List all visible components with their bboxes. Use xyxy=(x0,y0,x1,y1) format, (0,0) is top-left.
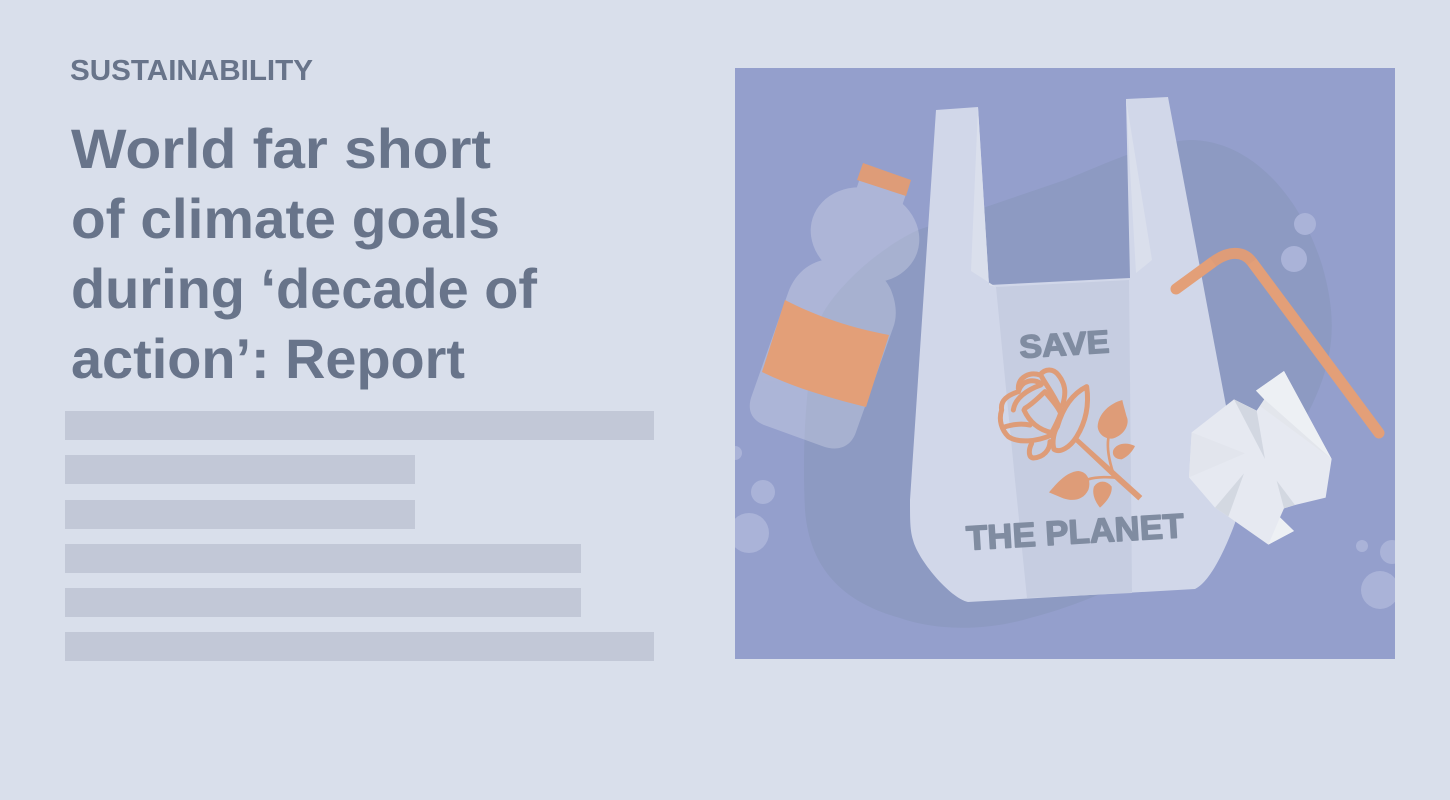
background blob xyxy=(804,140,1332,628)
left handle fold xyxy=(971,108,994,286)
headline xyxy=(71,117,537,390)
right handle fold xyxy=(1126,99,1152,273)
icon: plastic bag xyxy=(910,97,1240,602)
tissue facets xyxy=(1256,371,1332,459)
headline: of climate goals xyxy=(71,187,500,250)
bubbles xyxy=(728,213,1404,609)
bottle cap xyxy=(857,163,911,196)
category label: SUSTAINABILITY xyxy=(70,55,313,87)
bottle body xyxy=(750,173,932,448)
infographic canvas xyxy=(65,60,1395,661)
panel: illustration xyxy=(728,68,1404,659)
headline: World far short xyxy=(71,117,491,180)
placeholder text bars xyxy=(65,411,654,661)
icon: plastic bottle xyxy=(750,163,932,448)
bottle label xyxy=(762,300,889,407)
tissue body xyxy=(1189,371,1332,545)
slogan: save: SAVE xyxy=(1018,323,1110,365)
icon: rose xyxy=(1000,370,1142,508)
bag outline xyxy=(910,97,1240,602)
slogan: the planet: THE PLANET xyxy=(965,507,1185,558)
icon: drinking straw xyxy=(1176,253,1379,433)
headline: during ‘decade of xyxy=(71,257,537,320)
headline: action’: Report xyxy=(71,327,465,390)
icon: crumpled tissue xyxy=(1189,371,1332,545)
bag centre panel xyxy=(996,280,1132,598)
panel background xyxy=(735,68,1395,659)
